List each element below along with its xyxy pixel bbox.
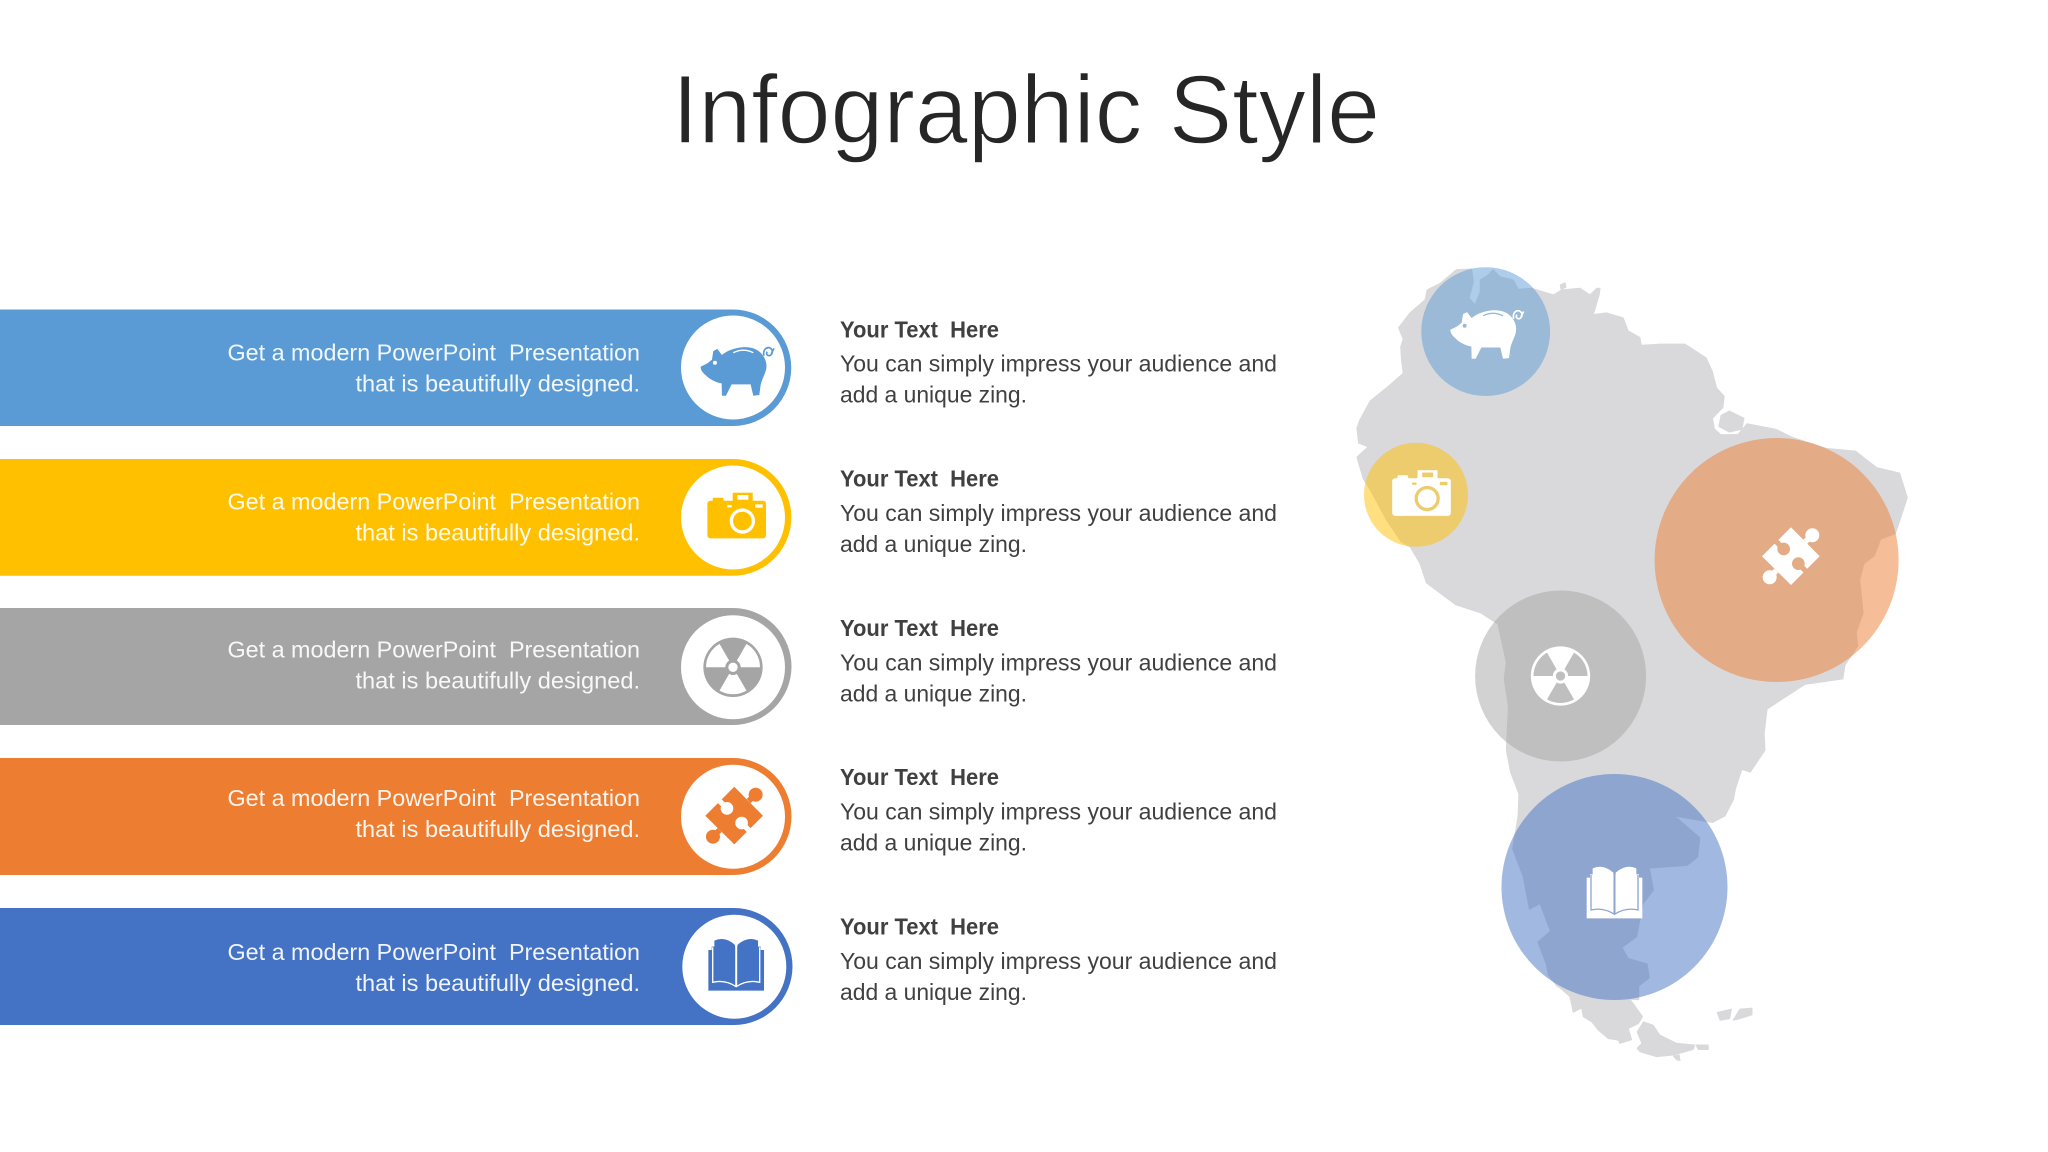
text block 2: Your Text Here	[840, 466, 999, 492]
banner text	[228, 785, 640, 842]
text block 4	[840, 764, 1277, 856]
banner shape	[0, 310, 791, 426]
banner text: that is beautifully designed.	[356, 371, 640, 397]
banner text: Get a modern PowerPoint Presentation	[228, 939, 640, 965]
icon disc	[681, 765, 785, 869]
banner shape	[0, 758, 792, 875]
text block 1: add a unique zing.	[840, 382, 1027, 408]
map marker: radiation	[1475, 590, 1646, 762]
title: Infographic Style	[672, 55, 1380, 164]
banner text: Get a modern PowerPoint Presentation	[228, 636, 640, 662]
banner shape	[0, 608, 792, 725]
icon: piggy bank	[701, 347, 774, 396]
text block 1: Your Text Here	[840, 316, 999, 342]
icon: camera	[1392, 470, 1451, 516]
text block 3: add a unique zing.	[840, 680, 1027, 706]
icon disc	[681, 316, 785, 420]
map marker: piggy bank	[1421, 267, 1550, 396]
banner text	[228, 939, 640, 996]
icon: open book	[708, 939, 764, 991]
banner text: that is beautifully designed.	[356, 668, 640, 694]
icon disc	[681, 466, 785, 570]
text block 4: Your Text Here	[840, 764, 999, 790]
text block 1: You can simply impress your audience and	[840, 351, 1277, 377]
banner text: that is beautifully designed.	[356, 970, 640, 996]
marker circle	[1475, 590, 1646, 762]
marker circle	[1655, 438, 1899, 682]
banner text: Get a modern PowerPoint Presentation	[228, 488, 640, 514]
map marker: camera	[1364, 443, 1468, 547]
marker circle	[1502, 774, 1728, 1000]
text block 5: Your Text Here	[840, 914, 999, 940]
banner text	[228, 488, 640, 546]
panel: gray banner	[0, 608, 792, 725]
panel: yellow banner	[0, 459, 791, 576]
marker circle	[1364, 443, 1468, 547]
panel: orange banner	[0, 758, 792, 875]
banner shape	[0, 459, 791, 576]
text block 3: You can simply impress your audience and	[840, 649, 1277, 675]
text block 2: add a unique zing.	[840, 531, 1027, 557]
text block 5	[840, 914, 1277, 1005]
banner shape	[0, 908, 793, 1025]
marker circle	[1421, 267, 1550, 396]
banner text: that is beautifully designed.	[356, 816, 640, 842]
text block 2	[840, 466, 1277, 557]
banner text: that is beautifully designed.	[356, 520, 640, 546]
map marker: book	[1502, 774, 1728, 1000]
icon: puzzle piece	[1762, 527, 1820, 585]
icon: puzzle piece	[705, 787, 763, 844]
panel: blue banner	[0, 310, 791, 426]
panel: dark blue banner	[0, 908, 793, 1025]
banner text: Get a modern PowerPoint Presentation	[228, 785, 640, 811]
text block 5: add a unique zing.	[840, 979, 1027, 1005]
map: South America	[1357, 269, 1907, 1061]
icon disc	[682, 915, 786, 1019]
text block 2: You can simply impress your audience and	[840, 500, 1277, 526]
text block 4: add a unique zing.	[840, 830, 1027, 856]
icon: open book	[1587, 867, 1642, 918]
icon: radiation symbol	[1531, 646, 1590, 706]
icon disc	[681, 615, 785, 719]
text block 5: You can simply impress your audience and	[840, 948, 1277, 974]
icon: camera	[707, 493, 766, 538]
text block 1	[840, 316, 1277, 408]
banner text: Get a modern PowerPoint Presentation	[228, 340, 640, 366]
banner text	[228, 340, 640, 397]
icon: radiation symbol	[703, 638, 763, 697]
icon: piggy bank	[1450, 310, 1524, 359]
banner text	[228, 636, 640, 694]
text block 4: You can simply impress your audience and	[840, 799, 1277, 825]
text block 3	[840, 615, 1277, 706]
text block 3: Your Text Here	[840, 615, 999, 641]
map marker: puzzle	[1655, 438, 1899, 682]
